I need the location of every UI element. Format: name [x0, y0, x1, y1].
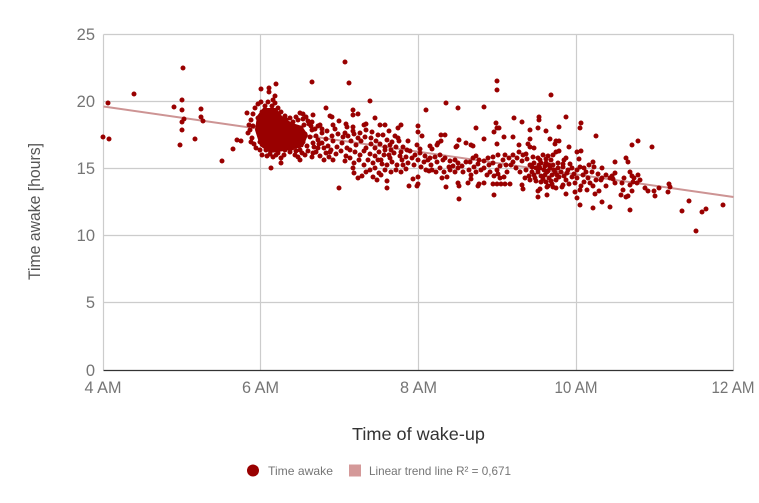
y axis tick labels: 0 — [86, 362, 95, 380]
y axis tick labels — [77, 26, 95, 380]
x axis tick labels: 12 AM — [712, 379, 754, 397]
scatter points: time awake — [103, 62, 723, 231]
y axis tick labels: 5 — [86, 294, 95, 312]
legend label: trend line: Linear trend line R² = 0,671 — [369, 464, 511, 478]
legend marker: time awake — [247, 464, 259, 476]
legend marker: trend line — [349, 464, 361, 476]
y axis tick labels: 15 — [77, 160, 95, 178]
x axis title: Time of wake-up — [352, 424, 485, 444]
y axis tick labels: 20 — [77, 93, 95, 111]
y axis tick labels: 25 — [77, 26, 95, 44]
y axis tick labels: 10 — [77, 227, 95, 245]
x axis tick labels: 10 AM — [554, 379, 598, 397]
x axis tick labels: 6 AM — [242, 379, 279, 397]
linear trend line — [104, 106, 734, 197]
legend label: time awake: Time awake — [268, 464, 333, 478]
legend — [247, 464, 511, 478]
x axis tick labels: 4 AM — [84, 379, 122, 397]
y axis title: Time awake [hours] — [26, 143, 44, 280]
x axis tick labels — [84, 379, 754, 397]
x axis tick labels: 8 AM — [400, 379, 437, 397]
